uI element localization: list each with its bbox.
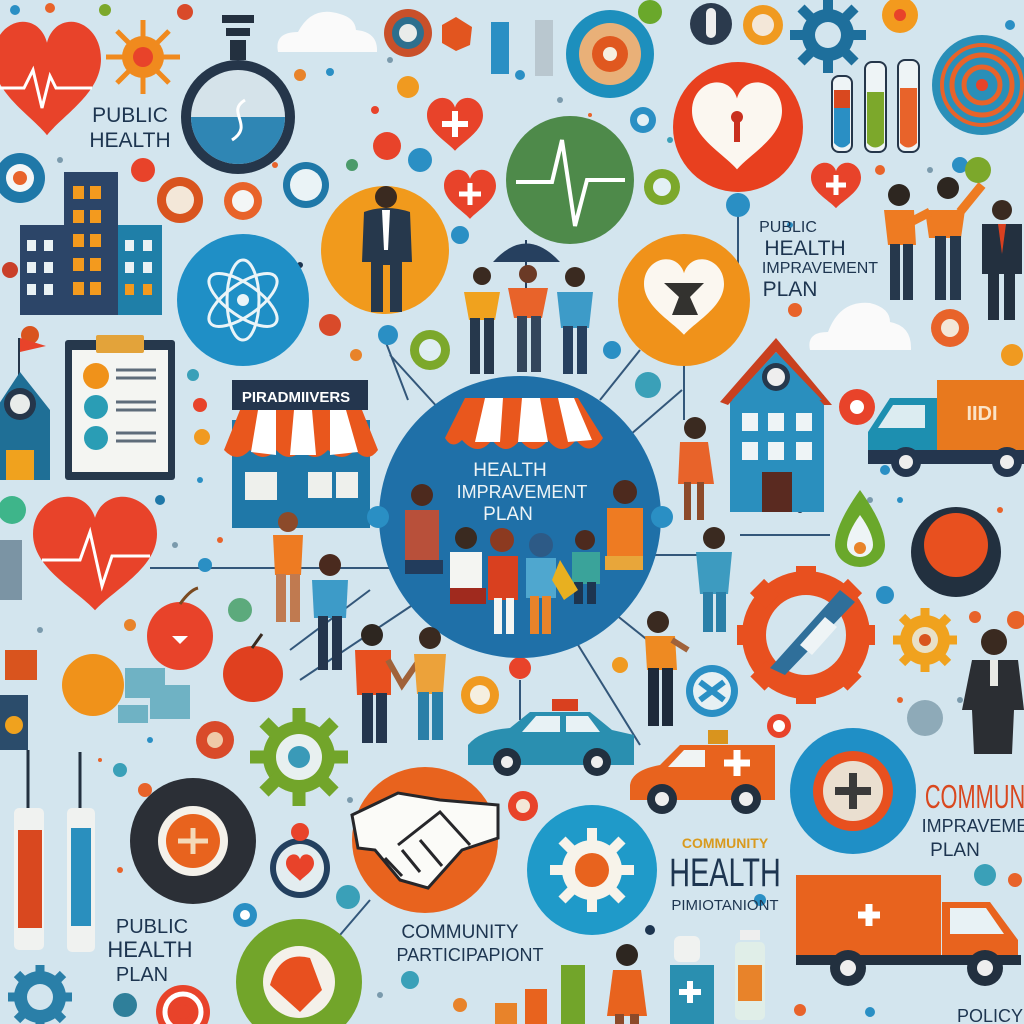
panel: storefront (224, 380, 378, 528)
heading: public health plan: PUBLIC (116, 916, 188, 938)
person: orange dress (607, 944, 647, 1024)
icon: heart with pulse, top left (0, 22, 101, 135)
icon: red button (911, 507, 1001, 597)
icon: target bottom (156, 985, 210, 1024)
icon: delivery truck right (868, 380, 1024, 477)
icon: syringe blue (67, 752, 95, 952)
icon: blue gear top (790, 0, 866, 73)
icon: tall tower (491, 20, 553, 76)
heading: public health plan: PLAN (116, 964, 168, 986)
icon: orange fruit (62, 654, 124, 716)
icon: spiral target (932, 35, 1024, 135)
icon: orange circle with suited man (321, 186, 449, 314)
icon: orange splash (442, 17, 472, 51)
heading: public health: PUBLIC (92, 104, 168, 127)
bar chart (495, 965, 585, 1024)
icon: blue circle with white gear (527, 805, 657, 935)
icon: left school building with flag (0, 338, 50, 480)
seated community group (405, 480, 643, 634)
icon: syringe red (14, 750, 44, 950)
icon: blue gear bottom left (8, 965, 72, 1024)
icon: blue ring with orange core (566, 10, 654, 98)
icon: orange sun (106, 20, 180, 94)
icon: orange coin (882, 0, 918, 33)
heading: public health improvement plan: IMPRAVEMENT (762, 260, 878, 277)
icon: blue house with clock (720, 338, 832, 512)
icon: heart with plus 3 (811, 163, 861, 208)
icon: clipboard checklist (65, 335, 175, 480)
icon: orange circle with white heart (618, 234, 750, 366)
icon: ring with heart (270, 823, 330, 898)
icon: test tubes (832, 60, 919, 152)
heading: public health: HEALTH (89, 129, 171, 152)
icon: city building (20, 172, 162, 315)
icon: orange gear with pen (737, 566, 875, 704)
icon: yellow gear (893, 608, 957, 672)
icon: delivery truck right: IIDI (966, 403, 998, 425)
heading: community health: HEALTH (669, 850, 781, 895)
central heading: HEALTH (473, 460, 547, 481)
icon: ambulance (630, 730, 775, 814)
people under umbrella (464, 240, 593, 374)
heading: community health: COMMUNITY (682, 835, 769, 851)
icon: medical box (670, 936, 714, 1024)
icon: water drop (835, 490, 885, 567)
icon: green circle with orange blob (236, 919, 362, 1024)
central heading: PLAN (483, 504, 533, 525)
connector lines (150, 210, 830, 935)
central heading: IMPRAVEMENT (457, 482, 587, 502)
icon: red apple (223, 634, 283, 702)
central awning (445, 398, 603, 449)
heading: community improvement plan: COMMUN (925, 778, 1024, 815)
heading: public health plan: HEALTH (107, 937, 193, 962)
icon: bottle (735, 930, 765, 1020)
heading: community improvement plan (922, 778, 1024, 861)
icon: green gear (250, 708, 348, 806)
person: woman standing (678, 417, 714, 520)
icon: large red circle with white heart (673, 62, 803, 192)
icon: blue ring with star (686, 665, 738, 717)
person: teal jacket (696, 527, 732, 632)
heading: community health: PIMIOTANIONT (671, 897, 779, 914)
panel: central community circle (367, 376, 673, 658)
icon: dark circle with orange badge (130, 778, 256, 904)
people group, top right (878, 157, 1022, 320)
person: orange shirt (273, 512, 303, 622)
icon: cloud (277, 12, 377, 52)
icon: police car (468, 699, 634, 776)
icon: left tablet blocks (0, 540, 37, 680)
heading: public health improvement plan: HEALTH (764, 237, 846, 260)
icon: heart with plus (427, 98, 483, 151)
person: blue shirt (312, 554, 348, 670)
icon: dark badge (690, 3, 732, 45)
icon: blue circle with medical plus (790, 728, 916, 854)
heading: community participant: PARTICIPAPIONT (396, 945, 544, 965)
heading: public health improvement plan: PLAN (763, 278, 817, 301)
icon: handshake circle (352, 767, 498, 913)
icon: delivery truck bottom (796, 875, 1021, 986)
person: man in dark suit (962, 629, 1024, 754)
icon: green circle with pulse (506, 116, 634, 244)
icon: left machine (0, 695, 28, 750)
heading: public health improvement plan: PUBLIC (759, 219, 817, 236)
icon: cloud lower right (809, 303, 911, 350)
icon: stopwatch with water (181, 15, 295, 174)
icon: apple with bite (147, 588, 213, 670)
people: couple holding hands (355, 624, 446, 743)
icon: heart with pulse, left (33, 497, 157, 610)
icon: heart with plus 2 (444, 170, 496, 219)
heading: community participant: COMMUNITY (401, 922, 519, 943)
icon: dark orange ring (384, 9, 432, 57)
person: orange top woman (645, 611, 688, 726)
heading: community improvement plan: PLAN (930, 840, 980, 861)
icon: blue circle with atom (177, 234, 309, 366)
icon: teal blocks (118, 668, 190, 723)
panel: storefront: PIRADMIIVERS (242, 389, 350, 406)
heading: community health (669, 835, 781, 914)
